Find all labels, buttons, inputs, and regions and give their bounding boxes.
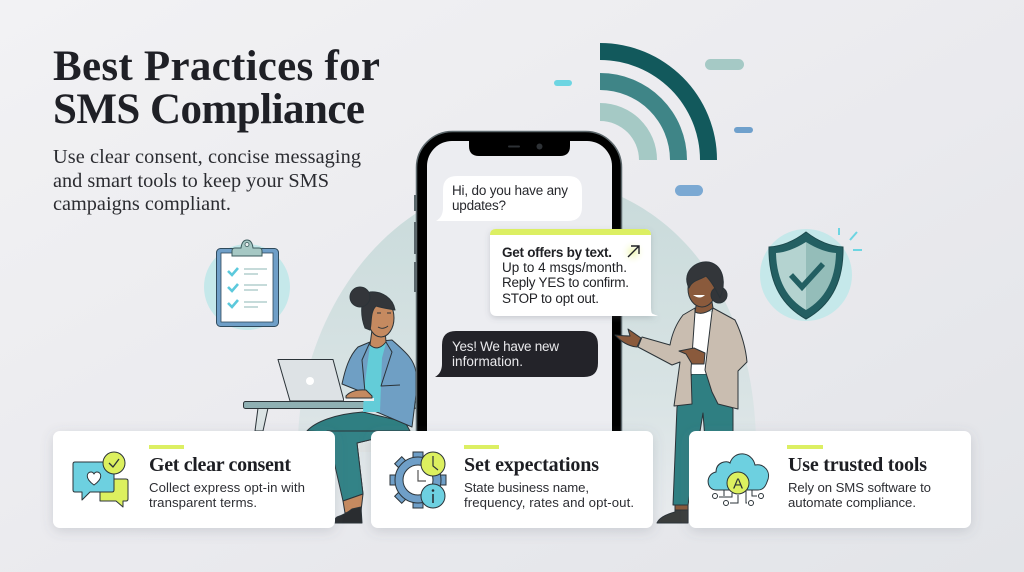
desk xyxy=(244,402,416,431)
hair xyxy=(362,292,395,330)
icon: cloud automation: A xyxy=(733,476,743,492)
laptop xyxy=(278,360,344,401)
shoe xyxy=(657,505,688,523)
open hand xyxy=(615,329,641,347)
chat bubble: question xyxy=(436,176,582,221)
ankle xyxy=(343,494,363,513)
chat bubble: offer: STOP to opt out. xyxy=(502,291,599,306)
card: use trusted tools xyxy=(689,431,971,528)
phone xyxy=(414,132,622,512)
subtitle: Use clear consent, concise messaging xyxy=(53,146,361,168)
card: use trusted tools: Rely on SMS software to xyxy=(788,480,931,495)
signal arcs xyxy=(600,43,717,160)
card: set expectations: State business name, xyxy=(464,480,589,495)
shirt xyxy=(691,312,713,374)
card: set expectations: Set expectations xyxy=(464,454,599,476)
hand xyxy=(346,390,372,398)
floating dashes xyxy=(554,59,753,196)
phone notch xyxy=(469,141,570,156)
neck and head xyxy=(695,296,713,313)
subtitle: and smart tools to keep your SMS xyxy=(53,170,329,192)
chat bubble: reply: information. xyxy=(452,354,523,369)
card: get clear consent: Collect express opt-in with xyxy=(149,480,305,495)
icon: shield xyxy=(760,228,862,321)
card: use trusted tools: Use trusted tools xyxy=(788,454,927,476)
subtitle: campaigns compliant. xyxy=(53,193,231,215)
chat bubble: reply: Yes! We have new xyxy=(452,339,559,354)
chat bubble: offer: Get offers by text. xyxy=(502,245,612,260)
icon: cloud automation xyxy=(708,454,769,506)
jacket xyxy=(638,308,695,406)
card: get clear consent: transparent terms. xyxy=(149,495,257,510)
chat bubble: offer: Reply YES to confirm. xyxy=(502,275,629,290)
card: use trusted tools: automate compliance. xyxy=(788,495,916,510)
icon: consent chat xyxy=(73,452,128,507)
background disc xyxy=(298,178,756,530)
card: get clear consent xyxy=(53,431,335,528)
smile xyxy=(693,295,705,298)
title xyxy=(53,43,380,133)
neck and head xyxy=(370,330,386,348)
title: Best Practices for xyxy=(53,43,380,90)
icon: arrow xyxy=(620,239,646,265)
chair seat xyxy=(353,443,371,452)
blazer xyxy=(342,340,416,427)
card: get clear consent: Get clear consent xyxy=(149,454,291,476)
title: SMS Compliance xyxy=(53,86,365,133)
icon: clipboard xyxy=(204,240,290,330)
card: set expectations: frequency, rates and opt-out. xyxy=(464,495,634,510)
chat bubble: offer: Up to 4 msgs/month. xyxy=(502,260,627,275)
trousers xyxy=(307,412,410,501)
chat bubble: reply xyxy=(435,331,598,377)
trousers xyxy=(673,374,733,505)
chat bubble: offer xyxy=(490,229,658,316)
icon: gear with clock and info xyxy=(390,452,446,508)
person: standing woman xyxy=(615,262,747,523)
person: seated woman at laptop xyxy=(244,287,416,523)
subtitle xyxy=(53,146,361,215)
face xyxy=(377,313,391,328)
hair xyxy=(711,287,727,303)
shoe xyxy=(335,507,362,523)
card: set expectations xyxy=(371,431,653,528)
chat bubble: question: updates? xyxy=(452,198,506,213)
shirt xyxy=(363,343,386,412)
pointing hand xyxy=(679,348,705,364)
chat bubble: question: Hi, do you have any xyxy=(452,183,568,198)
